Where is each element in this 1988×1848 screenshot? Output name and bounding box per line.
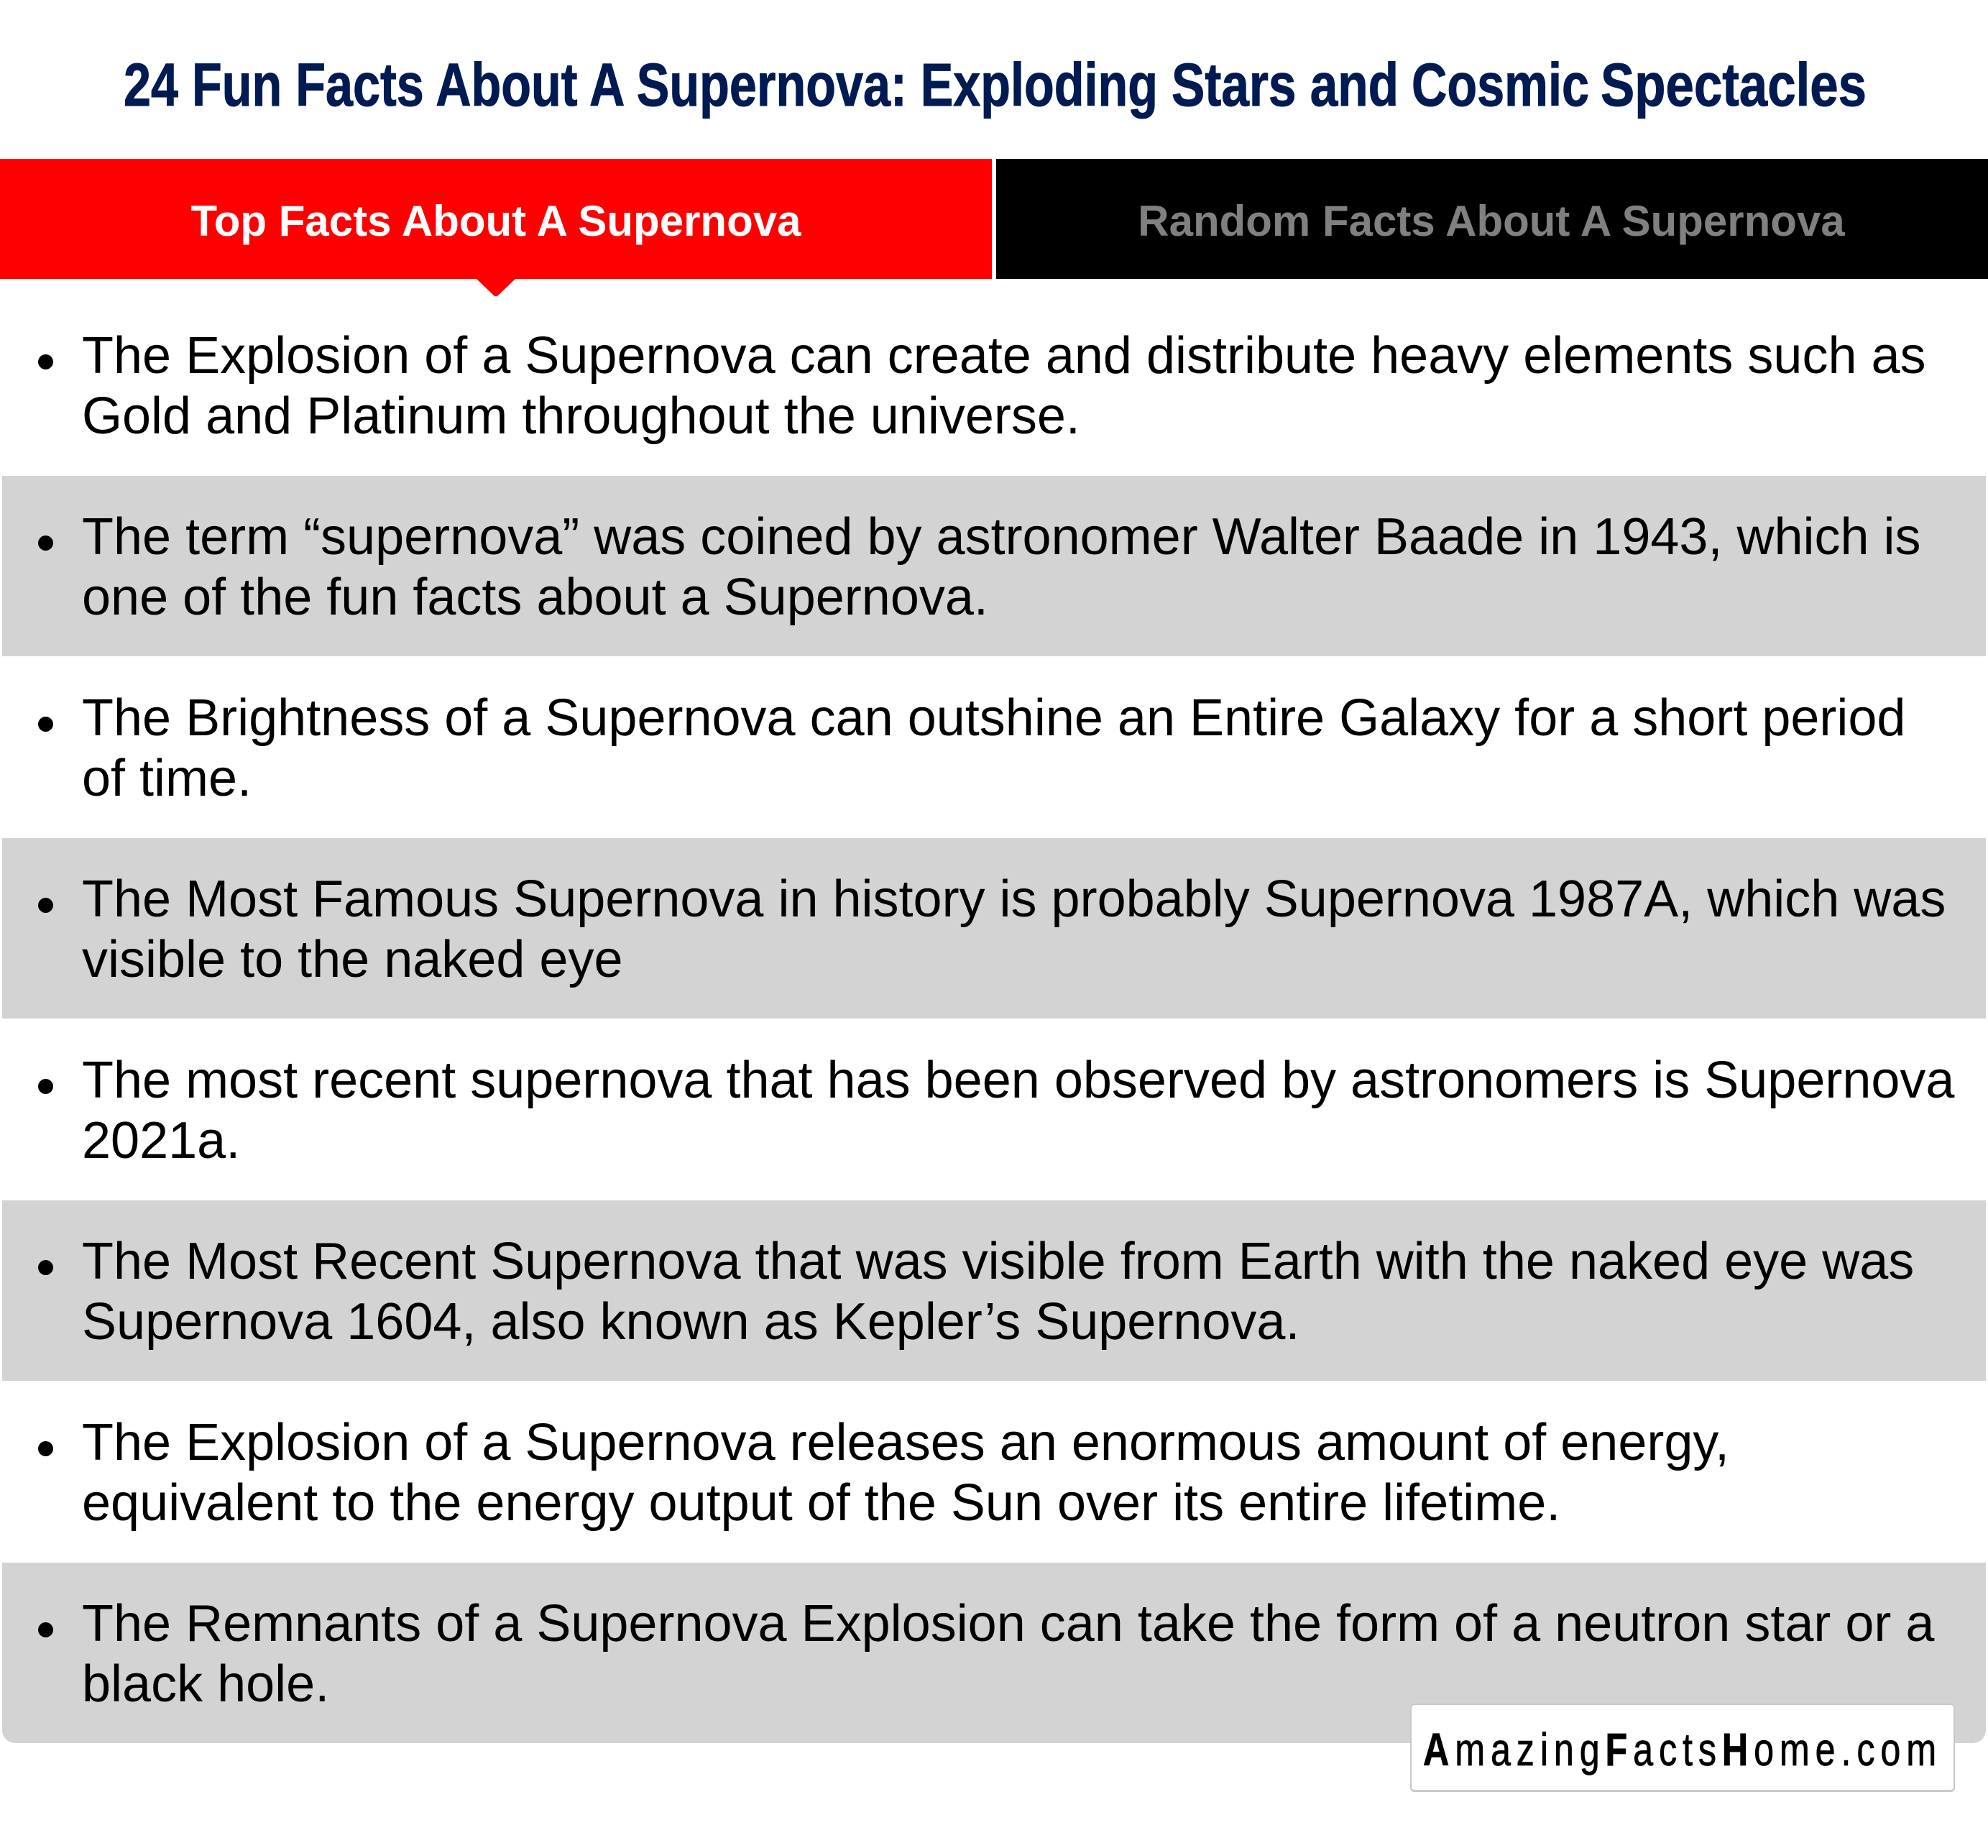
fact row 6: [2, 1200, 1986, 1381]
fact row 3: of time.: [82, 750, 252, 807]
fact row 7: The Explosion of a Supernova releases an enormous amount of energy,: [82, 1414, 1729, 1471]
title: Stars and: [1172, 51, 1399, 119]
fact row 3: [38, 689, 1905, 807]
tab: random facts: [996, 159, 1988, 279]
fact row 1: Gold and Platinum throughout the universe.: [82, 387, 1080, 445]
fact row 2: one of the fun facts about a Supernova.: [82, 569, 988, 626]
fact row 5: 2021a.: [82, 1112, 240, 1169]
fact row 6: The Most Recent Supernova that was visible from Earth with the naked eye was: [82, 1233, 1914, 1290]
tab label: Random Facts About A Supernova: [1138, 197, 1845, 245]
title: Spectacles: [1601, 51, 1867, 119]
title: Cosmic: [1412, 51, 1589, 119]
fact row 1: [38, 327, 1926, 445]
fact row 2: The term “supernova” was coined by astronomer Walter Baade in 1943, which is: [82, 508, 1921, 566]
fact row 7: equivalent to the energy output of the Sun over its entire lifetime.: [82, 1474, 1560, 1532]
title: 24 Fun Facts About A Supernova: Exploding: [124, 51, 1158, 119]
fact row 5: The most recent supernova that has been observed by astronomers is Supernova: [82, 1052, 1954, 1109]
fact row 8: [2, 1563, 1986, 1743]
fact row 8: The Remnants of a Supernova Explosion can take the form of a neutron star or a: [82, 1595, 1934, 1652]
fact row 2: [2, 476, 1986, 656]
fact row 7: [38, 1414, 1729, 1532]
fact row 4: [2, 838, 1986, 1019]
fact row 3: The Brightness of a Supernova can outshine an Entire Galaxy for a short period: [82, 689, 1905, 747]
logo badge: [1410, 1704, 1955, 1792]
fact row 6: Supernova 1604, also known as Kepler’s Supernova.: [82, 1293, 1299, 1351]
fact row 1: The Explosion of a Supernova can create and distribute heavy elements such as: [82, 327, 1926, 385]
fact row 4: visible to the naked eye: [82, 931, 622, 988]
tab: top facts: [0, 159, 992, 296]
fact row 8: black hole.: [82, 1655, 329, 1713]
fact row 5: [38, 1052, 1955, 1169]
tab pointer: [477, 279, 515, 296]
fact row 4: The Most Famous Supernova in history is probably Supernova 1987A, which was: [82, 870, 1946, 928]
tab label: Top Facts About A Supernova: [191, 197, 801, 245]
